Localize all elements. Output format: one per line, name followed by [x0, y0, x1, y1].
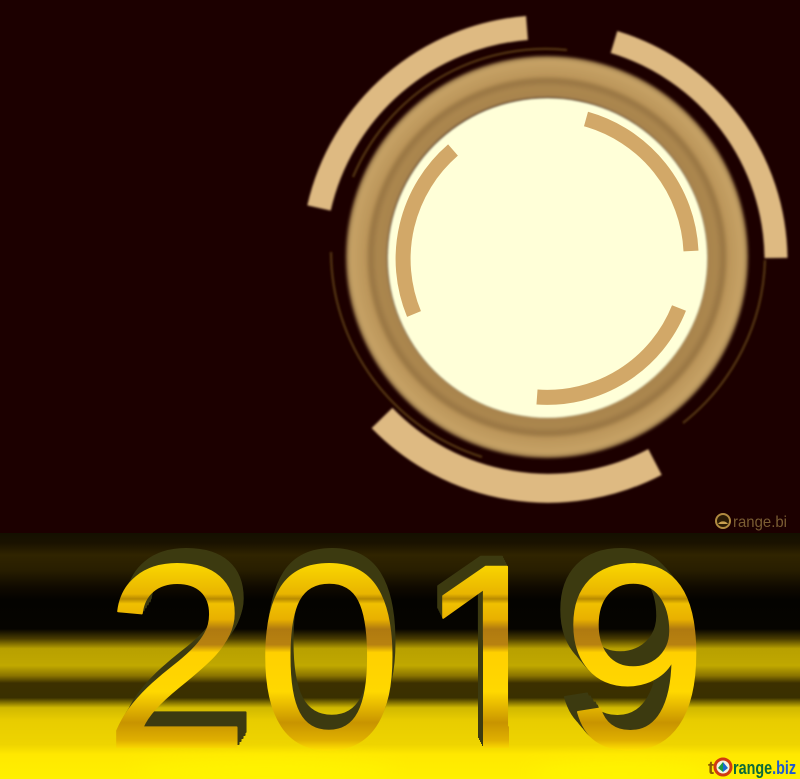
outer arc: right: [614, 42, 776, 258]
cream central disc: [388, 98, 708, 418]
watermark text: range.bi: [733, 514, 787, 531]
watermark icon: [716, 514, 730, 528]
thin brown orbit arcs: [331, 49, 765, 457]
inner arc: right: [586, 119, 691, 251]
watermark: lower logo: [708, 758, 796, 778]
logo letter t: t: [708, 758, 714, 778]
outer arc: bottom: [382, 418, 655, 488]
outer ring: [367, 77, 727, 437]
title: 2019 gold numerals: [116, 548, 696, 748]
watermark: upper logo: [716, 514, 787, 531]
golden striped floor: [0, 533, 800, 779]
inner arc: bottom: [537, 308, 679, 397]
logo text: range.biz: [733, 758, 796, 778]
inner arc: left: [403, 150, 453, 314]
outer arc: top left: [319, 28, 527, 208]
circular emblem: [319, 28, 776, 488]
logo icon: [715, 759, 731, 775]
floor glow reflections: [135, 758, 710, 779]
